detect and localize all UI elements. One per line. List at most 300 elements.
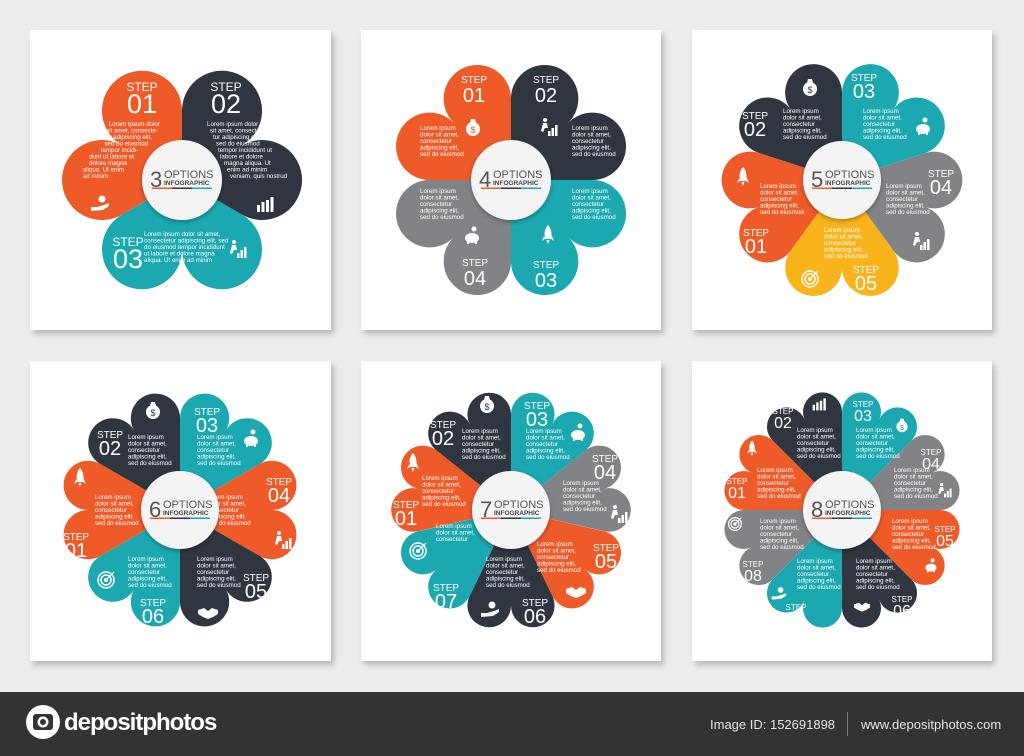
text blocks: Lorem ipsum bbox=[128, 556, 164, 563]
center label: 7 bbox=[480, 497, 492, 522]
text blocks: adipiscing elit, bbox=[757, 486, 796, 494]
text blocks: Lorem ipsum bbox=[197, 434, 233, 441]
text blocks: adipiscing elit, bbox=[526, 448, 565, 454]
text blocks: sed do eiusmod bbox=[783, 134, 827, 141]
text blocks: adipiscing elit, bbox=[207, 514, 246, 520]
text blocks: sed do eiusmod bbox=[128, 460, 172, 467]
step labels: 05 bbox=[936, 533, 954, 550]
text blocks: adipiscing elit, bbox=[420, 144, 459, 152]
step labels: STEP bbox=[210, 80, 242, 94]
text blocks: adipiscing elit, bbox=[892, 538, 931, 544]
text blocks: dolor sit amet, bbox=[128, 440, 167, 448]
text blocks: consectetur bbox=[797, 571, 829, 578]
panel: 4 options bbox=[361, 30, 661, 330]
text blocks: tur adipiscing elit, bbox=[104, 134, 152, 141]
text blocks: Lorem ipsum bbox=[824, 227, 860, 234]
text blocks: adipiscing elit, bbox=[197, 576, 236, 582]
text blocks: adipiscing elit, bbox=[760, 538, 799, 544]
text blocks: dolor sit amet, bbox=[95, 500, 134, 508]
center label: OPTIONS bbox=[825, 499, 875, 511]
step labels: 03 bbox=[526, 409, 548, 431]
step labels: 01 bbox=[728, 485, 746, 502]
text blocks: dolor sit amet, bbox=[863, 114, 902, 122]
step labels: 01 bbox=[127, 89, 157, 119]
text blocks: Lorem ipsum bbox=[856, 427, 892, 434]
step labels bbox=[393, 401, 619, 628]
step labels: 01 bbox=[745, 236, 767, 258]
text blocks: tempor incidi- bbox=[101, 147, 138, 154]
text blocks: sed do eiusmod bbox=[197, 460, 241, 467]
center label: OPTIONS bbox=[163, 499, 213, 511]
text blocks: Lorem ipsum bbox=[760, 518, 796, 525]
text blocks: consectetur bbox=[95, 507, 127, 514]
text blocks: enim ad minim bbox=[227, 166, 267, 174]
text blocks: adipiscing elit, bbox=[563, 500, 602, 506]
text blocks: Lorem ipsum bbox=[526, 428, 562, 435]
step labels: 01 bbox=[395, 508, 417, 530]
text blocks: Lorem ipsum bbox=[797, 427, 833, 434]
step labels: STEP bbox=[461, 75, 487, 86]
text blocks: dolor sit amet, bbox=[797, 434, 836, 440]
text blocks: Lorem ipsum bbox=[95, 494, 131, 501]
text blocks: sed do eiusmod bbox=[863, 134, 907, 141]
text blocks: adipiscing elit, bbox=[863, 128, 902, 134]
step labels: STEP bbox=[743, 228, 769, 239]
text blocks: magna aliqua. Ut bbox=[224, 160, 271, 167]
text blocks: Lorem ipsum bbox=[462, 428, 498, 435]
text blocks: Lorem ipsum bbox=[572, 188, 608, 195]
text blocks: sed do eiusmod bbox=[757, 493, 801, 500]
text blocks: dolor sit amet, bbox=[420, 132, 459, 138]
step labels: 04 bbox=[594, 462, 616, 484]
text blocks: consectetur adipiscing elit, sed bbox=[144, 238, 229, 244]
text blocks: Lorem ipsum bbox=[894, 467, 930, 474]
text blocks: adipiscing elit, bbox=[128, 576, 167, 582]
text blocks: sed do eiusmod bbox=[797, 584, 841, 591]
step labels: 03 bbox=[853, 81, 875, 103]
text blocks: Lorem ipsum bbox=[420, 125, 456, 132]
text blocks: adipiscing elit, bbox=[797, 446, 836, 454]
text blocks: consectetur bbox=[462, 441, 494, 448]
step labels: STEP bbox=[533, 75, 559, 86]
text blocks: adipiscing elit, bbox=[886, 202, 925, 210]
text blocks: dolor sit amet, bbox=[128, 562, 167, 570]
step labels: 03 bbox=[113, 244, 143, 274]
text blocks: consectetur bbox=[886, 196, 918, 203]
text blocks: Lorem ipsum dolor bbox=[207, 121, 258, 128]
text blocks: labore et dolore bbox=[220, 154, 264, 160]
icons bbox=[737, 79, 930, 287]
step labels: 05 bbox=[595, 551, 617, 573]
text blocks: sed do eiusmod bbox=[526, 454, 570, 461]
flower: 5 petals bbox=[714, 53, 970, 296]
panel: 3 options bbox=[30, 30, 331, 330]
flower: 6 petals bbox=[64, 385, 296, 635]
step labels: STEP bbox=[892, 595, 912, 604]
text blocks bbox=[83, 121, 288, 264]
text blocks: dolor sit amet, bbox=[894, 474, 933, 480]
text blocks: sed do eiusmod bbox=[760, 544, 804, 551]
center label: INFOGRAPHIC bbox=[164, 180, 210, 187]
icons bbox=[91, 196, 274, 258]
center label: INFOGRAPHIC bbox=[494, 510, 540, 517]
text blocks: Lorem ipsum bbox=[783, 108, 819, 115]
flower: 3 petals bbox=[47, 56, 317, 289]
text blocks: consectetur bbox=[894, 480, 926, 487]
text blocks: adipiscing elit, bbox=[856, 578, 895, 584]
text blocks: consectetur bbox=[892, 531, 924, 538]
text blocks: consectetur bbox=[760, 531, 792, 538]
step labels: 01 bbox=[65, 540, 87, 562]
text blocks: adipiscing elit, bbox=[462, 448, 501, 454]
text blocks: sed do eiusmod bbox=[128, 582, 172, 589]
step labels: STEP bbox=[63, 532, 89, 543]
step labels: 03 bbox=[854, 408, 872, 425]
step labels: 07 bbox=[435, 591, 457, 613]
text blocks: sed do eiusmod bbox=[563, 506, 607, 513]
text blocks: sed do eiusmod bbox=[572, 214, 616, 221]
step labels: STEP bbox=[935, 525, 955, 534]
step labels: STEP bbox=[126, 80, 158, 94]
text blocks: dunt ut labore et bbox=[89, 154, 134, 160]
step labels bbox=[727, 400, 955, 628]
text blocks: adipiscing elit, bbox=[422, 494, 461, 502]
step labels: STEP bbox=[743, 560, 763, 569]
step labels: STEP bbox=[928, 169, 954, 180]
text blocks: Lorem ipsum bbox=[128, 434, 164, 441]
text blocks: sed do eiusmod bbox=[420, 151, 464, 158]
step labels: 04 bbox=[930, 177, 952, 199]
text blocks: consectetur bbox=[420, 138, 452, 145]
text blocks bbox=[422, 428, 607, 589]
text blocks: dolor sit amet, bbox=[197, 562, 236, 570]
footer bar bbox=[0, 692, 1024, 756]
step labels: STEP bbox=[522, 598, 548, 609]
text blocks: consectetur bbox=[783, 121, 815, 128]
step labels: 02 bbox=[535, 85, 557, 107]
step labels: 01 bbox=[463, 85, 485, 107]
step labels: STEP bbox=[853, 400, 873, 409]
text blocks: dolor sit amet, bbox=[856, 434, 895, 440]
step labels: STEP bbox=[462, 258, 488, 269]
step labels: 06 bbox=[524, 606, 546, 628]
text blocks: sed do eiusmod bbox=[104, 140, 149, 148]
step labels: STEP bbox=[592, 454, 618, 465]
center label: INFOGRAPHIC bbox=[825, 180, 871, 187]
text blocks: Lorem ipsum bbox=[197, 556, 233, 563]
center label: 6 bbox=[149, 497, 161, 522]
text blocks: Lorem ipsum bbox=[757, 467, 793, 474]
text blocks: consectetur bbox=[572, 138, 604, 145]
center label: OPTIONS bbox=[825, 169, 875, 181]
flower: 4 petals bbox=[382, 51, 640, 309]
icons: $ bbox=[807, 85, 813, 95]
flower: 8 petals bbox=[718, 386, 966, 634]
text blocks: sed do eiusmod bbox=[207, 520, 251, 527]
step labels: 03 bbox=[196, 415, 218, 437]
text blocks: sed do eiusmod bbox=[422, 501, 466, 508]
text blocks: consectetur bbox=[420, 201, 452, 208]
website: www.depositphotos.com bbox=[860, 717, 1001, 732]
text blocks: sed do eiusmod bbox=[856, 584, 900, 591]
text blocks: dolor sit amet, bbox=[207, 500, 246, 508]
step labels: STEP bbox=[853, 265, 879, 276]
icons: $ bbox=[484, 402, 490, 412]
center label bbox=[472, 471, 550, 549]
step labels: STEP bbox=[773, 407, 793, 416]
text blocks: dolor sit amet, bbox=[757, 474, 796, 480]
step labels bbox=[63, 407, 292, 628]
step labels: 05 bbox=[245, 581, 267, 603]
text blocks: consectetur bbox=[422, 488, 454, 495]
center label: INFOGRAPHIC bbox=[163, 510, 209, 517]
text blocks: dolor sit amet, bbox=[462, 434, 501, 442]
center label: 4 bbox=[479, 167, 491, 192]
step labels: 02 bbox=[774, 415, 792, 432]
text blocks: sed do eiusmod bbox=[420, 214, 464, 221]
text blocks: sed do eiusmod bbox=[760, 209, 804, 216]
text blocks: sit amet, consecte bbox=[210, 128, 260, 134]
step labels: 04 bbox=[268, 485, 290, 507]
text blocks: sed do eiusmod bbox=[886, 209, 930, 216]
brand name: depositphotos bbox=[64, 709, 217, 736]
text blocks: consectetur bbox=[526, 441, 558, 448]
step labels: STEP bbox=[533, 260, 559, 271]
text blocks: consectetur bbox=[537, 554, 569, 561]
step labels bbox=[742, 73, 954, 295]
step labels: STEP bbox=[97, 430, 123, 441]
image id: Image ID: 152691898 bbox=[710, 717, 835, 732]
text blocks: Lorem ipsum bbox=[422, 475, 458, 482]
text blocks: sed do eiusmod bbox=[797, 453, 841, 460]
text blocks: Lorem ipsum bbox=[420, 188, 456, 195]
text blocks: consectetur bbox=[197, 569, 229, 576]
text blocks: aliqua. Ut enim bbox=[83, 166, 124, 174]
text blocks: sit amet, consecte- bbox=[106, 128, 158, 134]
text blocks: adipiscing elit, bbox=[420, 208, 459, 214]
step labels: STEP bbox=[266, 477, 292, 488]
center label: INFOGRAPHIC bbox=[825, 510, 871, 517]
center label bbox=[142, 140, 222, 220]
text blocks: adipiscing elit, bbox=[197, 454, 236, 460]
text blocks: Lorem ipsum dolor bbox=[109, 121, 160, 128]
icons bbox=[465, 118, 558, 244]
text blocks: sed do eiusmod bbox=[462, 454, 506, 461]
panel: 6 options bbox=[30, 361, 331, 661]
text blocks: sed do eiusmod bbox=[95, 520, 139, 527]
step labels: STEP bbox=[433, 583, 459, 594]
step labels: 06 bbox=[893, 603, 911, 620]
text blocks: sed do eiusmod bbox=[856, 453, 900, 460]
text blocks: consectetur bbox=[436, 536, 468, 543]
text blocks bbox=[757, 427, 938, 591]
text blocks: consectetur bbox=[757, 480, 789, 487]
text blocks: consectetur bbox=[824, 240, 856, 247]
step labels: 02 bbox=[211, 89, 241, 119]
center label bbox=[803, 141, 881, 219]
text blocks: Lorem ipsum dolor sit amet, bbox=[144, 231, 221, 238]
icons: $ bbox=[900, 425, 904, 432]
text blocks: dolor sit amet, bbox=[783, 114, 822, 122]
text blocks: adipiscing elit, bbox=[894, 486, 933, 494]
step labels: 02 bbox=[99, 438, 121, 460]
text blocks: Lorem ipsum bbox=[760, 183, 796, 190]
step labels: STEP bbox=[194, 407, 220, 418]
text blocks: aliqua. Ut enim ad minim bbox=[144, 257, 212, 264]
text blocks: ut labore et dolore magna bbox=[144, 250, 215, 258]
step labels: 05 bbox=[855, 273, 877, 295]
text blocks: consectetur bbox=[856, 440, 888, 447]
center label: OPTIONS bbox=[164, 169, 214, 181]
step labels: STEP bbox=[851, 73, 877, 84]
text blocks bbox=[760, 108, 930, 260]
text blocks: consectetur bbox=[197, 447, 229, 454]
text blocks: consectetur bbox=[863, 121, 895, 128]
text blocks: dolor sit amet, bbox=[420, 194, 459, 202]
center label bbox=[803, 471, 881, 549]
text blocks: adipiscing elit, bbox=[95, 514, 134, 520]
step labels: 08 bbox=[744, 568, 762, 585]
center label bbox=[471, 140, 551, 220]
icons: $ bbox=[470, 125, 476, 135]
text blocks: ad minim bbox=[83, 173, 108, 180]
step labels: 02 bbox=[432, 428, 454, 450]
text blocks: sed do eiusmod bbox=[197, 582, 241, 589]
text blocks: tur adipiscing elit, bbox=[213, 134, 261, 141]
step labels: STEP bbox=[593, 543, 619, 554]
text blocks: consectetur bbox=[128, 447, 160, 454]
text blocks: dolor sit amet, bbox=[572, 132, 611, 138]
step labels: STEP bbox=[921, 448, 941, 457]
text blocks: Lorem ipsum bbox=[207, 494, 243, 501]
text blocks: consectetur bbox=[760, 196, 792, 203]
step labels: STEP bbox=[430, 420, 456, 431]
text blocks: Lorem ipsum bbox=[863, 108, 899, 115]
text blocks: consectetur bbox=[856, 571, 888, 578]
text blocks: Lorem ipsum bbox=[886, 183, 922, 190]
text blocks: dolor sit amet, bbox=[526, 434, 565, 442]
text blocks: dolor sit amet, bbox=[572, 194, 611, 202]
text blocks: dolor sit amet, bbox=[856, 564, 895, 572]
text blocks: Lorem ipsum bbox=[572, 125, 608, 132]
icons bbox=[729, 398, 952, 612]
step labels: STEP bbox=[140, 598, 166, 609]
step labels: 04 bbox=[464, 268, 486, 290]
center label: INFOGRAPHIC bbox=[493, 180, 539, 187]
text blocks: Lorem ipsum bbox=[486, 556, 522, 563]
text blocks: consectetur bbox=[563, 493, 595, 500]
text blocks: Lorem ipsum bbox=[563, 480, 599, 487]
step labels bbox=[112, 80, 242, 274]
text blocks: dolor sit amet, bbox=[892, 524, 931, 532]
text blocks bbox=[95, 434, 251, 589]
panel: 7 options bbox=[361, 361, 661, 661]
text blocks: Lorem ipsum bbox=[436, 523, 472, 530]
step labels: STEP bbox=[524, 401, 550, 412]
text blocks: sed do eiusmod bbox=[486, 582, 530, 589]
step labels bbox=[461, 75, 559, 292]
text blocks: dolor sit amet, bbox=[537, 548, 576, 554]
step labels: STEP bbox=[727, 477, 747, 486]
text blocks: adipiscing elit, bbox=[760, 202, 799, 210]
text blocks: adipiscing elit, bbox=[572, 144, 611, 152]
text blocks: adipiscing elit, bbox=[797, 578, 836, 584]
panel: 8 options bbox=[692, 361, 992, 661]
panel: 5 options bbox=[692, 30, 992, 330]
step labels: 06 bbox=[142, 606, 164, 628]
text blocks: dolor sit amet, bbox=[824, 234, 863, 240]
step labels: STEP bbox=[112, 235, 144, 249]
text blocks: veniam, quis nostrud bbox=[230, 173, 288, 180]
text blocks: adipiscing elit, bbox=[572, 208, 611, 214]
center label: 5 bbox=[811, 167, 823, 192]
icon: depositphotos logo bbox=[26, 705, 60, 739]
center label: 3 bbox=[150, 167, 162, 192]
text blocks: consectetur bbox=[486, 569, 518, 576]
text blocks: dolor sit amet, bbox=[197, 440, 236, 448]
icons bbox=[74, 402, 292, 619]
text blocks bbox=[420, 125, 616, 221]
step labels: STEP bbox=[393, 500, 419, 511]
text blocks: adipiscing elit, bbox=[128, 454, 167, 460]
text blocks: dolor sit amet, bbox=[886, 190, 925, 196]
step labels: 07 bbox=[787, 611, 805, 628]
text blocks: sed do eiusmod bbox=[537, 567, 581, 574]
center label: 8 bbox=[811, 497, 823, 522]
text blocks: tempor incididunt ut bbox=[218, 147, 272, 154]
text blocks: adipiscing elit, bbox=[486, 576, 525, 582]
center label: OPTIONS bbox=[493, 169, 543, 181]
step labels: 02 bbox=[744, 119, 766, 141]
step labels: 04 bbox=[922, 456, 940, 473]
text blocks: Lorem ipsum bbox=[797, 558, 833, 565]
text blocks: dolor sit amet, bbox=[422, 482, 461, 488]
text blocks: sed do eiusmod bbox=[572, 151, 616, 158]
text blocks: consectetur bbox=[128, 569, 160, 576]
text blocks: dolor sit amet, bbox=[563, 486, 602, 494]
text blocks: adipiscing elit, bbox=[856, 446, 895, 454]
text blocks: dolor sit amet, bbox=[760, 190, 799, 196]
text blocks: consectetur bbox=[207, 507, 239, 514]
icons bbox=[407, 396, 628, 617]
step labels: STEP bbox=[243, 573, 269, 584]
center label bbox=[141, 471, 219, 549]
text blocks: dolor sit amet, bbox=[797, 564, 836, 572]
text blocks: do eiusmod tempor incididunt bbox=[144, 244, 225, 251]
text blocks: sed do eiusmod bbox=[216, 140, 260, 148]
text blocks: dolore magna bbox=[89, 160, 128, 167]
text blocks: adipiscing elit, bbox=[824, 246, 863, 254]
step labels: STEP bbox=[786, 603, 806, 612]
text blocks: Lorem ipsum bbox=[892, 518, 928, 525]
text blocks: Lorem ipsum bbox=[856, 558, 892, 565]
text blocks: consectetur bbox=[572, 201, 604, 208]
text blocks: sed do eiusmod bbox=[892, 544, 936, 551]
step labels: 03 bbox=[535, 270, 557, 292]
text blocks: consectetur bbox=[797, 440, 829, 447]
text blocks: sed do eiusmod bbox=[894, 493, 938, 500]
step labels: STEP bbox=[742, 111, 768, 122]
text blocks: adipiscing elit, bbox=[537, 560, 576, 568]
text blocks: dolor sit amet, bbox=[486, 562, 525, 570]
text blocks: adipiscing elit, bbox=[783, 128, 822, 134]
icons: $ bbox=[150, 408, 156, 418]
text blocks: dolor sit amet, bbox=[760, 524, 799, 532]
center label: OPTIONS bbox=[494, 499, 544, 511]
text blocks: dolor sit amet, bbox=[436, 530, 475, 536]
flower: 7 petals bbox=[387, 385, 635, 627]
text blocks: sed do eiusmod bbox=[824, 253, 868, 260]
